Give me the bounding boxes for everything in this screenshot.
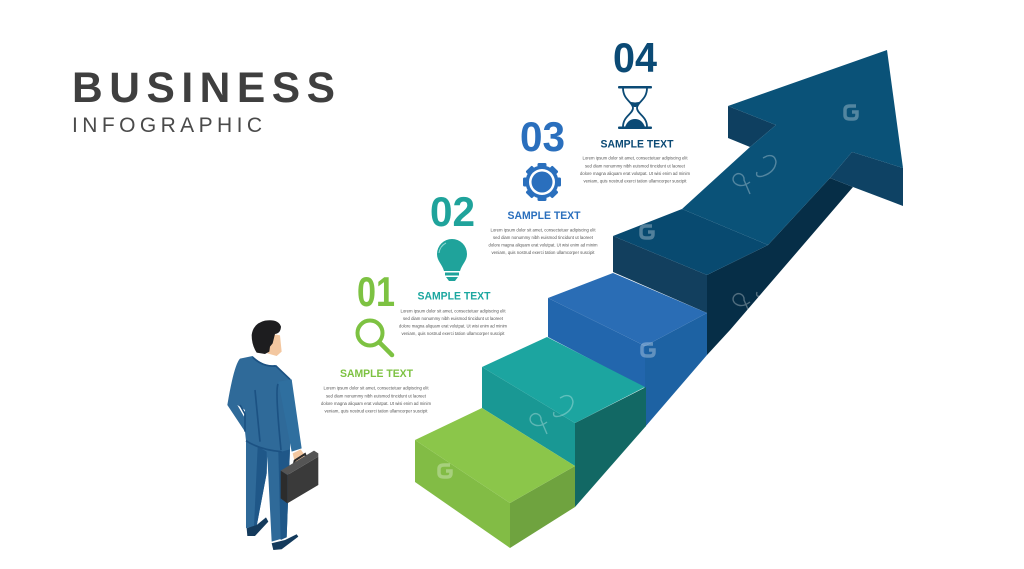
step 02 xyxy=(399,188,507,336)
heading 03: SAMPLE TEXT xyxy=(508,210,581,222)
businessman with briefcase xyxy=(227,320,318,550)
icon: gear xyxy=(523,163,561,201)
title: INFOGRAPHIC xyxy=(72,114,262,137)
arrow top surface xyxy=(682,50,903,245)
blue step xyxy=(548,273,707,427)
dark step top xyxy=(613,209,768,275)
title: BUSINESS xyxy=(72,65,335,112)
staircase arrow xyxy=(415,50,903,548)
number 04: 04 xyxy=(613,34,658,81)
text block 01: veniam, quis nostrud exerci tation ullamcorper suscipit xyxy=(324,408,428,413)
arrow head underside xyxy=(830,152,903,206)
text block 01: dolore magna aliquam erat volutpat. Ut wisi enim ad minim xyxy=(321,401,431,406)
hand xyxy=(293,449,305,463)
icon: hourglass xyxy=(618,86,652,129)
step 01 xyxy=(321,268,431,413)
text block 02: dolore magna aliquam erat volutpat. Ut wisi enim ad minim xyxy=(399,323,507,328)
text block 02: Lorem ipsum dolor sit amet, consectetuer adipiscing elit xyxy=(400,308,506,313)
heading 02: SAMPLE TEXT xyxy=(418,290,491,302)
text block 03: Lorem ipsum dolor sit amet, consectetuer adipiscing elit xyxy=(490,228,596,233)
dark step front face xyxy=(613,236,707,313)
text block 01 xyxy=(321,386,431,413)
step 03 xyxy=(488,113,598,255)
shoes xyxy=(247,517,298,550)
text block 03: sed diam nonummy nibh euismod tincidunt ut laoreet xyxy=(493,235,594,240)
teal step xyxy=(482,337,646,507)
text block 04: dolore magna aliquam erat volutpat. Ut wisi enim ad minim xyxy=(580,171,690,176)
text block 02 xyxy=(399,308,507,336)
text block 03: dolore magna aliquam erat volutpat. Ut wisi enim ad minim xyxy=(488,243,598,248)
arrow body right side xyxy=(707,178,853,355)
arrow notch side xyxy=(728,106,776,147)
icon: light bulb xyxy=(437,239,467,281)
watermarks xyxy=(439,106,857,477)
number 01: 01 xyxy=(357,268,395,315)
text block 01: sed diam nonummy nibh euismod tincidunt ut laoreet xyxy=(326,393,427,398)
heading 04: SAMPLE TEXT xyxy=(600,138,674,150)
hair xyxy=(252,320,281,354)
text block 04: sed diam nonummy nibh euismod tincidunt ut laoreet xyxy=(585,164,686,168)
text block 04: Lorem ipsum dolor sit amet, consectetuer adipiscing elit xyxy=(582,156,688,161)
number 03: 03 xyxy=(520,113,565,160)
text block 02: sed diam nonummy nibh euismod tincidunt ut laoreet xyxy=(403,316,504,321)
icon: magnifier xyxy=(358,320,392,355)
step 04 xyxy=(580,34,690,184)
text block 03 xyxy=(488,228,598,255)
legs xyxy=(246,438,290,542)
jacket xyxy=(227,356,302,452)
text block 01: Lorem ipsum dolor sit amet, consectetuer adipiscing elit xyxy=(324,386,429,390)
shirt collar xyxy=(253,353,277,365)
text block 04 xyxy=(580,156,690,184)
number 02: 02 xyxy=(430,188,475,235)
text block 03: veniam, quis nostrud exerci tation ullamcorper suscipit xyxy=(492,250,595,255)
text block 04: veniam, quis nostrud exerci tation ullamcorper suscipit xyxy=(584,179,687,184)
heading 01: SAMPLE TEXT xyxy=(340,368,413,380)
text block 02: veniam, quis nostrud exerci tation ullamcorper suscipit xyxy=(402,331,505,336)
skin: neck and ear xyxy=(267,334,282,356)
briefcase xyxy=(281,451,318,503)
title xyxy=(72,65,335,137)
green step xyxy=(415,408,575,548)
